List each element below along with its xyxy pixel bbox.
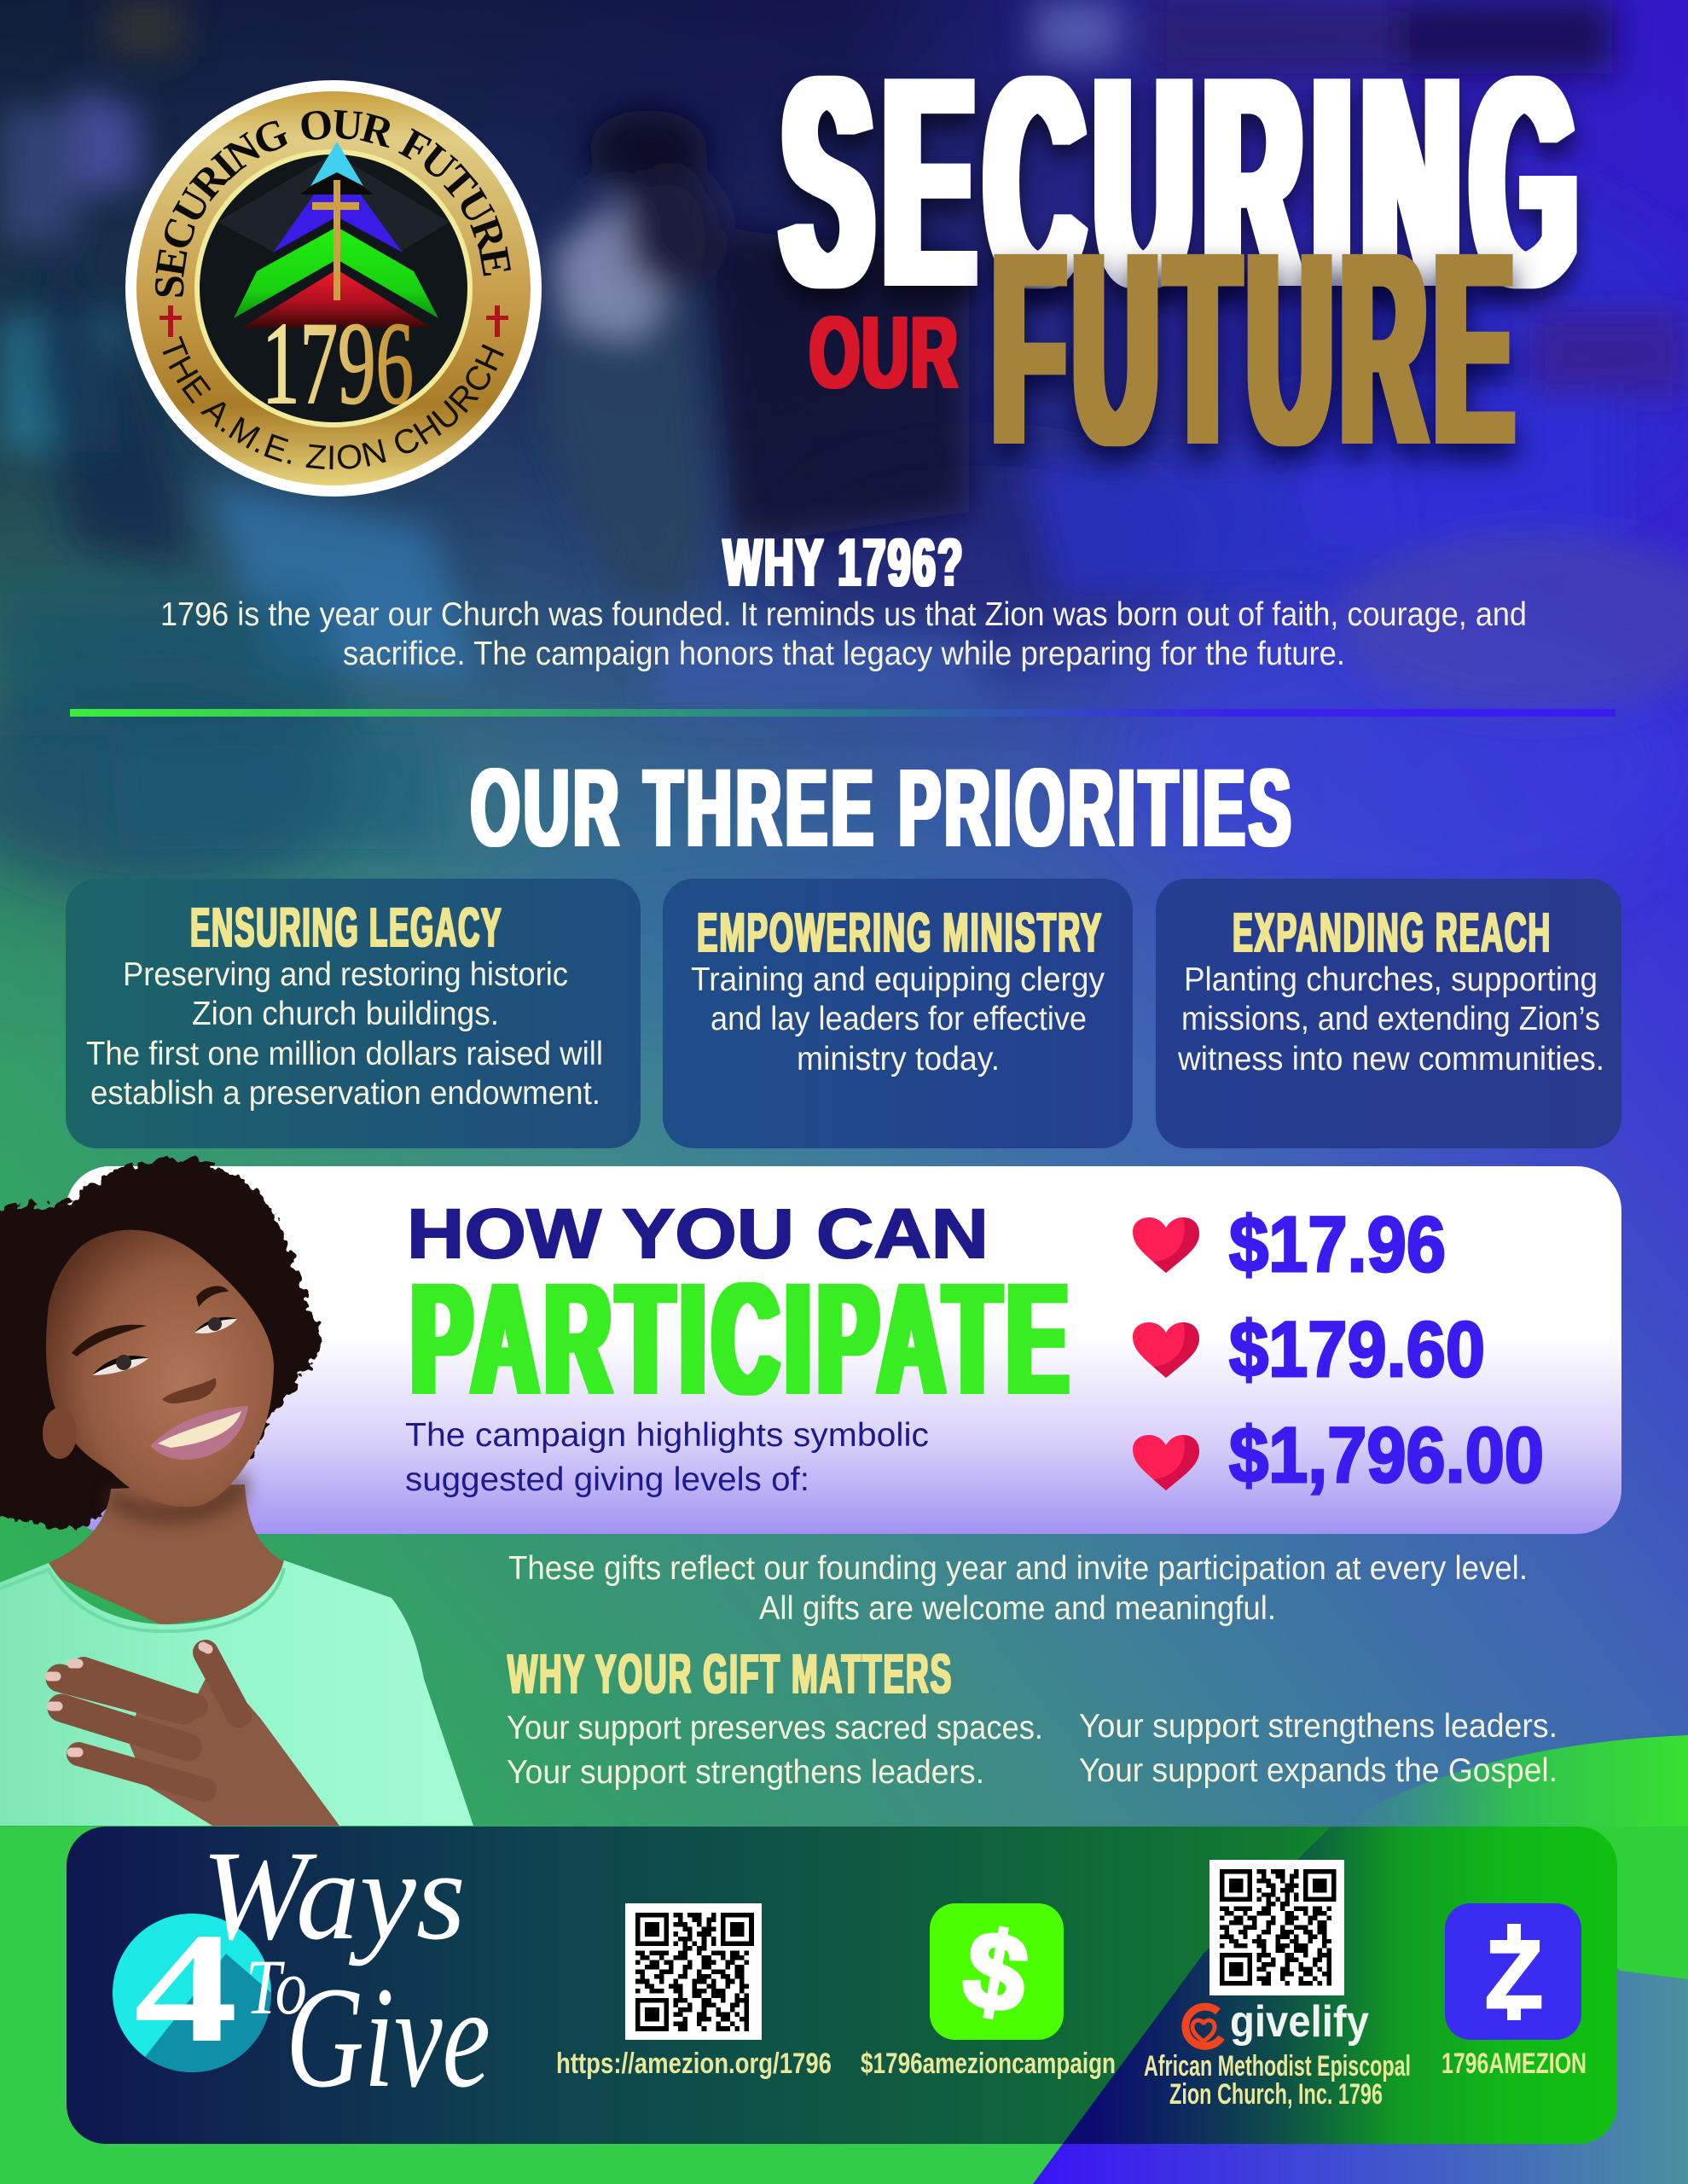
panel: how you can participate: PARTICIPATE [411,1252,1075,1427]
panel: ensuring legacy: establish a preservation endowment. [90,1075,600,1112]
title: OUR [809,296,960,410]
givelify qr code: givelify [1230,1997,1369,2047]
givelify qr code: Zion Church, Inc. 1796 [1169,2078,1383,2111]
panel: empowering ministry: EMPOWERING MINISTRY [697,902,1103,963]
giving levels: $1,796.00 [1229,1412,1544,1499]
why your gift matters: Your support strengthens leaders. [507,1754,984,1791]
givelify qr code [1144,1860,1411,2111]
icon: cash app [861,1903,1116,2080]
why 1796 heading: WHY 1796? [723,525,965,600]
badge year: 1796 [262,298,414,428]
panel: how you can participate [66,1166,1621,1534]
why your gift matters: Your support preserves sacred spaces. [507,1710,1043,1746]
why 1796 text: 1796 is the year our Church was founded. It reminds us that Zion was born out of faith, courage, and [160,596,1527,633]
ways to give script [201,1825,490,2117]
icon: cash app: $ [955,1907,1036,2037]
giving levels: $17.96 [1229,1201,1446,1288]
gifts note [508,1550,1528,1627]
participate text: The campaign highlights symbolic [405,1417,929,1454]
ways to give script: Ways [201,1825,466,1966]
panel: empowering ministry: ministry today. [797,1041,1000,1077]
panel: expanding reach [1156,879,1621,1148]
givelify qr code: African Methodist Episcopal [1144,2050,1411,2082]
icon: zelle [1441,1903,1586,2080]
participate text [405,1417,929,1498]
girl hand [49,1647,339,1826]
why your gift matters: WHY YOUR GIFT MATTERS [508,1643,953,1705]
icon: number 4 circle: 4 [134,1901,238,2076]
website qr code: https://amezion.org/1796 [556,2048,832,2080]
panel: ways to give [67,1825,1617,2144]
girl face features [72,1286,248,1460]
green swoosh background [1337,1735,1688,1979]
panel: ensuring legacy: Zion church buildings. [192,996,499,1032]
website qr code [556,1903,832,2080]
icon: zelle: Z [1485,1921,1543,2028]
badge arc text top: SECURING OUR FUTURE [155,109,511,297]
panel: ensuring legacy [66,879,641,1148]
participate text: suggested giving levels of: [405,1461,809,1498]
logo badge [125,80,542,497]
panel: expanding reach: Planting churches, supporting [1184,961,1598,998]
icon: number 4 circle [113,1901,271,2076]
badge crosses [160,305,508,337]
panel: empowering ministry: and lay leaders for effective [711,1001,1087,1037]
ways to give script: Give [286,1957,490,2117]
giving levels [1133,1201,1544,1499]
tree emblem [234,142,438,328]
why 1796 text: sacrifice. The campaign honors that legacy while preparing for the future. [343,636,1345,672]
why your gift matters: Your support expands the Gospel. [1079,1752,1557,1789]
gifts note: All gifts are welcome and meaningful. [759,1590,1276,1627]
giving levels: $179.60 [1229,1306,1485,1393]
ways to give script: To [246,1943,307,2030]
panel: ensuring legacy: The first one million dollars raised will [86,1036,603,1072]
girl photo illustration [0,1159,473,1826]
panel: ensuring legacy: Preserving and restoring historic [123,956,568,993]
panel: expanding reach: missions, and extending Zion’s [1181,1001,1600,1037]
icon: cash app: $1796amezioncampaign [861,2048,1116,2080]
panel: ensuring legacy: ENSURING LEGACY [190,897,502,958]
panel: expanding reach: witness into new communities. [1177,1041,1604,1077]
participate heading: HOW YOU CAN [407,1195,989,1273]
gifts note: These gifts reflect our founding year and invite participation at every level. [508,1550,1528,1587]
why your gift matters [507,1643,1557,1791]
badge arc text bottom: THE A.M.E. ZION CHURCH [162,336,504,469]
panel: empowering ministry [663,879,1133,1148]
why your gift matters: Your support strengthens leaders. [1079,1708,1557,1745]
why 1796 text [160,596,1527,672]
panel: empowering ministry: Training and equipping clergy [691,961,1105,998]
title [782,15,1588,501]
icon: zelle: 1796AMEZION [1441,2048,1586,2080]
